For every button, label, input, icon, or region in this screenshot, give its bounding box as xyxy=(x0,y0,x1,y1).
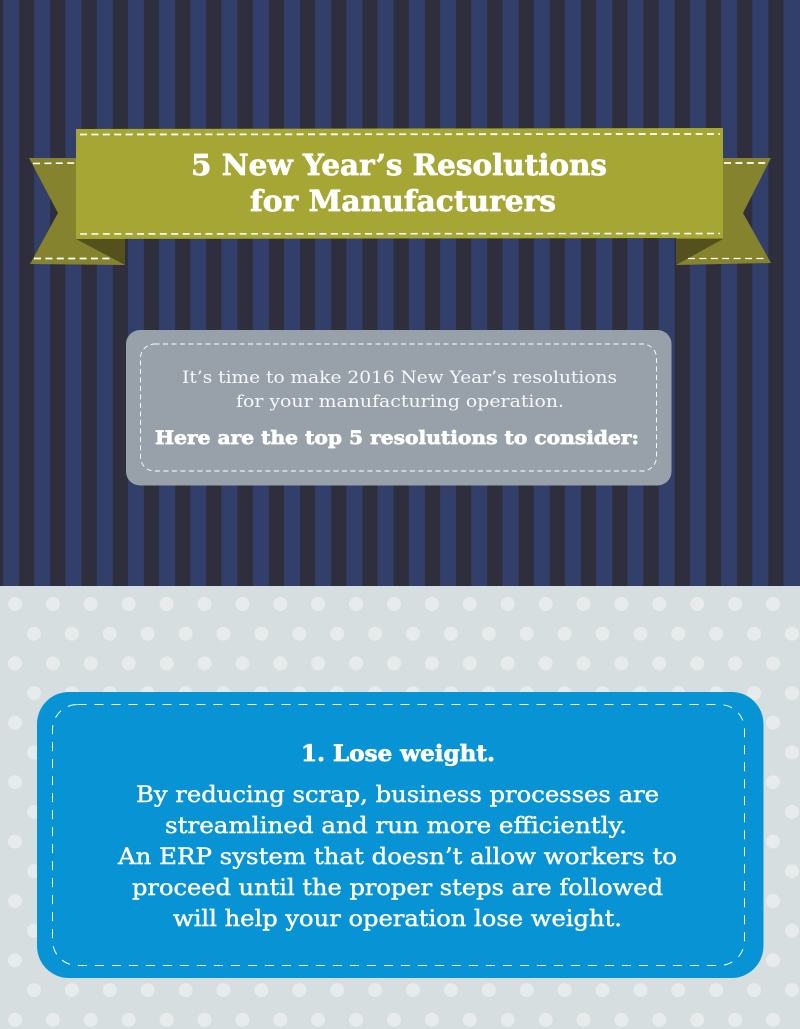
resolution heading: 1. Lose weight. xyxy=(301,741,495,767)
resolution body text xyxy=(117,783,677,932)
title ribbon xyxy=(29,128,771,265)
ribbon left tail xyxy=(29,158,125,265)
resolution body text: By reducing scrap, business processes are xyxy=(136,783,659,808)
ribbon title text: for Manufacturers xyxy=(250,184,556,218)
resolution body text: will help your operation lose weight. xyxy=(173,907,622,932)
intro text xyxy=(155,368,639,449)
ribbon title text: 5 New Year’s Resolutions xyxy=(191,148,607,182)
intro dashed border xyxy=(140,344,656,471)
intro text: Here are the top 5 resolutions to consider: xyxy=(155,428,639,449)
ribbon title text xyxy=(191,148,607,218)
resolution dashed border xyxy=(52,704,744,966)
panel: intro xyxy=(126,330,672,486)
resolution body text: streamlined and run more efficiently. xyxy=(165,814,627,839)
ribbon right fold xyxy=(676,239,723,265)
ribbon right tail xyxy=(676,158,771,265)
resolution panel background xyxy=(37,692,764,978)
background: dotted lower section xyxy=(0,586,800,1029)
ribbon main band xyxy=(76,128,723,239)
resolution body text: proceed until the proper steps are followed xyxy=(132,876,663,901)
ribbon stitching xyxy=(33,134,767,258)
background: striped header xyxy=(0,0,800,586)
intro text: It’s time to make 2016 New Year’s resolutions xyxy=(182,368,617,388)
panel: resolution 1 xyxy=(37,692,764,978)
ribbon left fold xyxy=(76,239,125,265)
intro text: for your manufacturing operation. xyxy=(236,392,564,412)
intro panel background xyxy=(126,330,672,486)
resolution body text: An ERP system that doesn’t allow workers to xyxy=(117,845,677,870)
